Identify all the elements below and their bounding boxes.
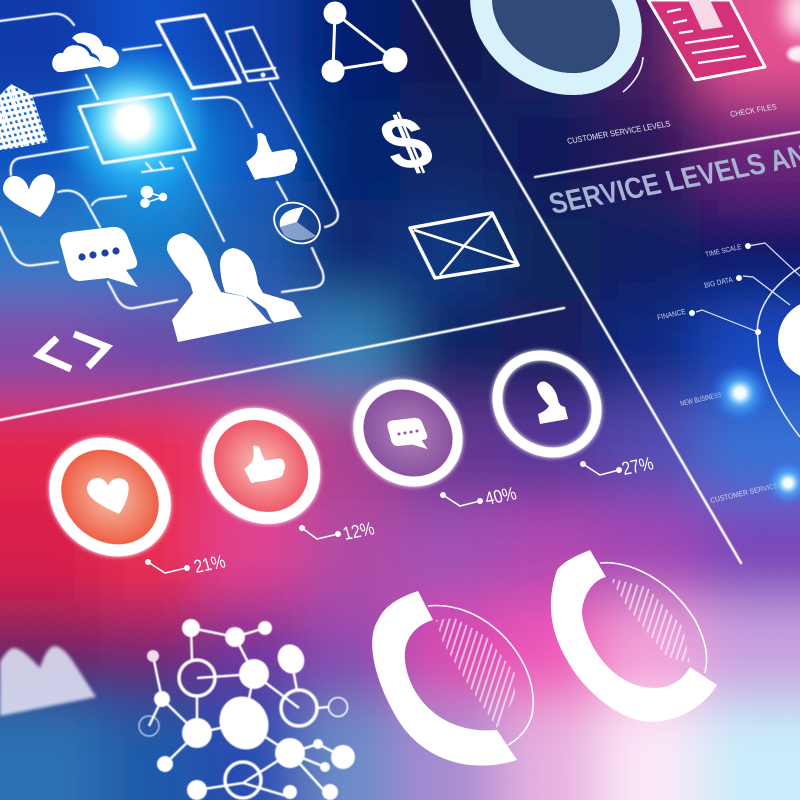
icon: phone — [226, 27, 278, 81]
labels: FINANCE — [656, 307, 687, 322]
stat: heart 21%: 21% — [191, 550, 228, 577]
icon: thumbs up — [246, 133, 297, 180]
network graph — [139, 619, 355, 800]
connectors and ring — [696, 243, 800, 437]
icon: share nodes — [141, 186, 166, 207]
icon: envelope — [410, 213, 518, 278]
donut chart right — [551, 550, 717, 722]
icon: heart — [3, 174, 55, 217]
labels: CUSTOMER SERVICE — [709, 481, 779, 505]
label: customer service levels: CUSTOMER SERVICE LEVELS — [566, 118, 672, 146]
monitor glow — [55, 44, 211, 200]
bar chart: blurred silhouette bottom left — [0, 646, 96, 716]
panel: radial service diagram — [656, 242, 800, 507]
labels: NEW BUSINESS — [679, 390, 722, 408]
icon: triangle network — [323, 3, 406, 81]
label: check files: CHECK FILES — [729, 102, 778, 119]
labels: BIG DATA — [703, 275, 734, 290]
icon: code brackets — [39, 334, 107, 369]
donut chart left — [372, 591, 533, 766]
divider lines — [0, 0, 800, 563]
network rings — [139, 660, 348, 798]
icon: people — [167, 233, 302, 342]
icon: cloud — [52, 33, 119, 72]
stat: person 27% — [478, 335, 656, 479]
icon: dollar sign: $ — [369, 101, 444, 187]
panel: check files document — [648, 0, 765, 80]
center white shape — [778, 300, 800, 380]
icon: chat bubble — [60, 227, 138, 287]
icon: pie gauge — [267, 195, 327, 251]
blue flares — [710, 363, 770, 423]
icon: monitor — [79, 94, 195, 172]
stat: chat 40%: 40% — [482, 482, 519, 509]
panel: customer service gauge — [454, 0, 658, 112]
network edges — [149, 628, 343, 797]
connector lines — [0, 14, 338, 308]
top right glow — [782, 0, 800, 62]
stat: heart 21% — [33, 421, 228, 577]
icon: building — [0, 84, 48, 150]
labels — [656, 242, 779, 505]
stat: thumbs up 12% — [187, 392, 377, 544]
stat: chat 40% — [339, 364, 519, 509]
network nodes — [147, 619, 355, 800]
icon: tablet — [157, 15, 240, 88]
labels: TIME SCALE — [704, 242, 742, 259]
stat: thumbs up 12%: 12% — [340, 517, 377, 544]
stat: person 27%: 27% — [619, 452, 656, 479]
panel: connected device diagram — [0, 14, 338, 308]
